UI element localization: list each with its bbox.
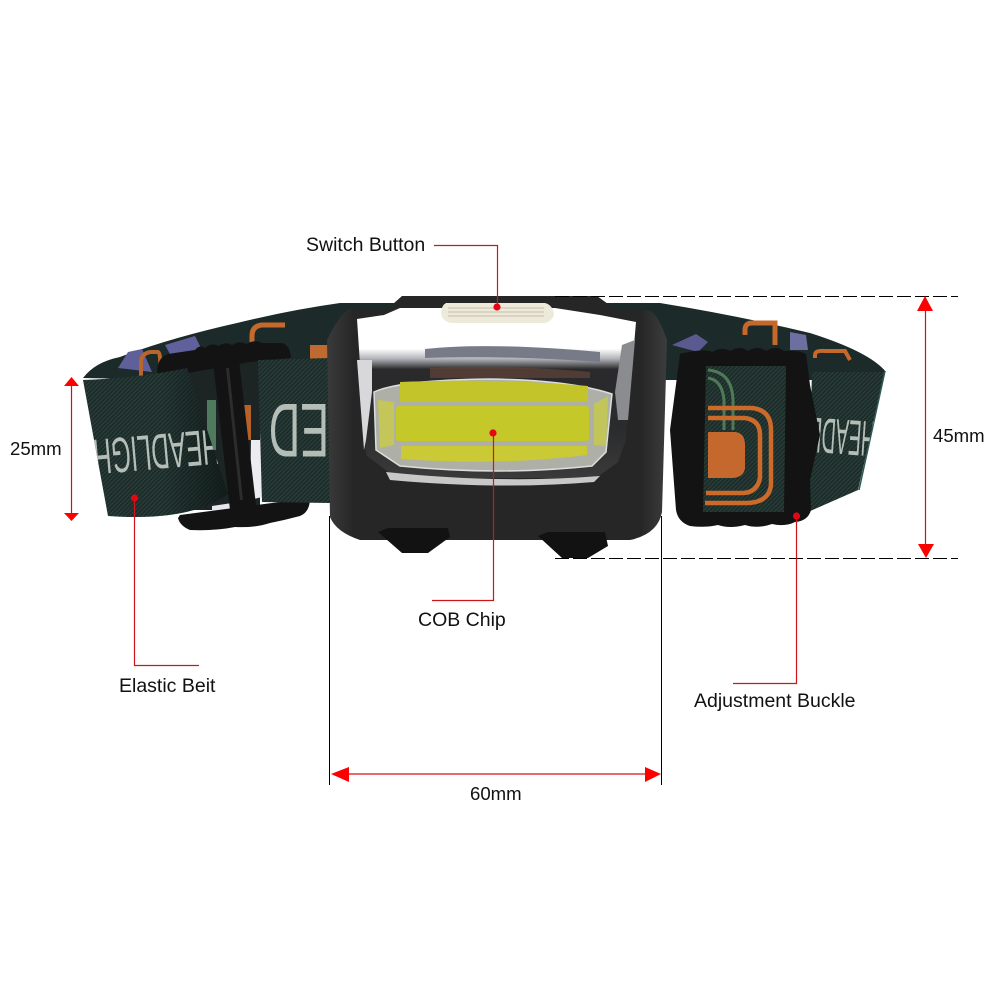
text: HEADLIGHT xyxy=(763,403,877,467)
callout: Adjustment Buckle xyxy=(694,512,856,712)
feet xyxy=(378,528,608,558)
right buckle xyxy=(670,348,820,527)
switch button xyxy=(441,303,554,323)
callout: Switch Button xyxy=(306,234,501,311)
buckle window with strap xyxy=(703,366,786,512)
dimension: 25mm: 25mm xyxy=(10,438,62,459)
right strap front xyxy=(810,371,886,511)
headlamp housing xyxy=(327,296,667,558)
dimension: 45mm xyxy=(917,296,985,558)
black dimension guide lines xyxy=(330,296,958,785)
left strap front xyxy=(76,368,228,517)
strap lettering: LED: LED xyxy=(269,387,353,472)
lens window xyxy=(357,308,636,478)
strap: back inner band xyxy=(83,303,886,380)
callout: Adjustment Buckle: Adjustment Buckle xyxy=(694,690,856,712)
dimension: 25mm xyxy=(10,377,79,521)
callout: Elastic Beit xyxy=(119,494,216,697)
lens lower rim xyxy=(386,472,600,486)
callout: Elastic Beit: Elastic Beit xyxy=(119,675,216,697)
callout: COB Chip: COB Chip xyxy=(418,609,506,631)
dimension: 60mm: 60mm xyxy=(470,783,522,804)
left buckle xyxy=(157,341,310,530)
callout: Switch Button: Switch Button xyxy=(306,234,425,256)
dimension: 60mm xyxy=(331,767,661,804)
centre strap section xyxy=(258,358,330,503)
gap behind left buckle xyxy=(190,360,262,513)
COB chip assembly xyxy=(374,379,612,471)
callout: COB Chip xyxy=(418,429,506,631)
dimension: 45mm: 45mm xyxy=(933,425,985,446)
